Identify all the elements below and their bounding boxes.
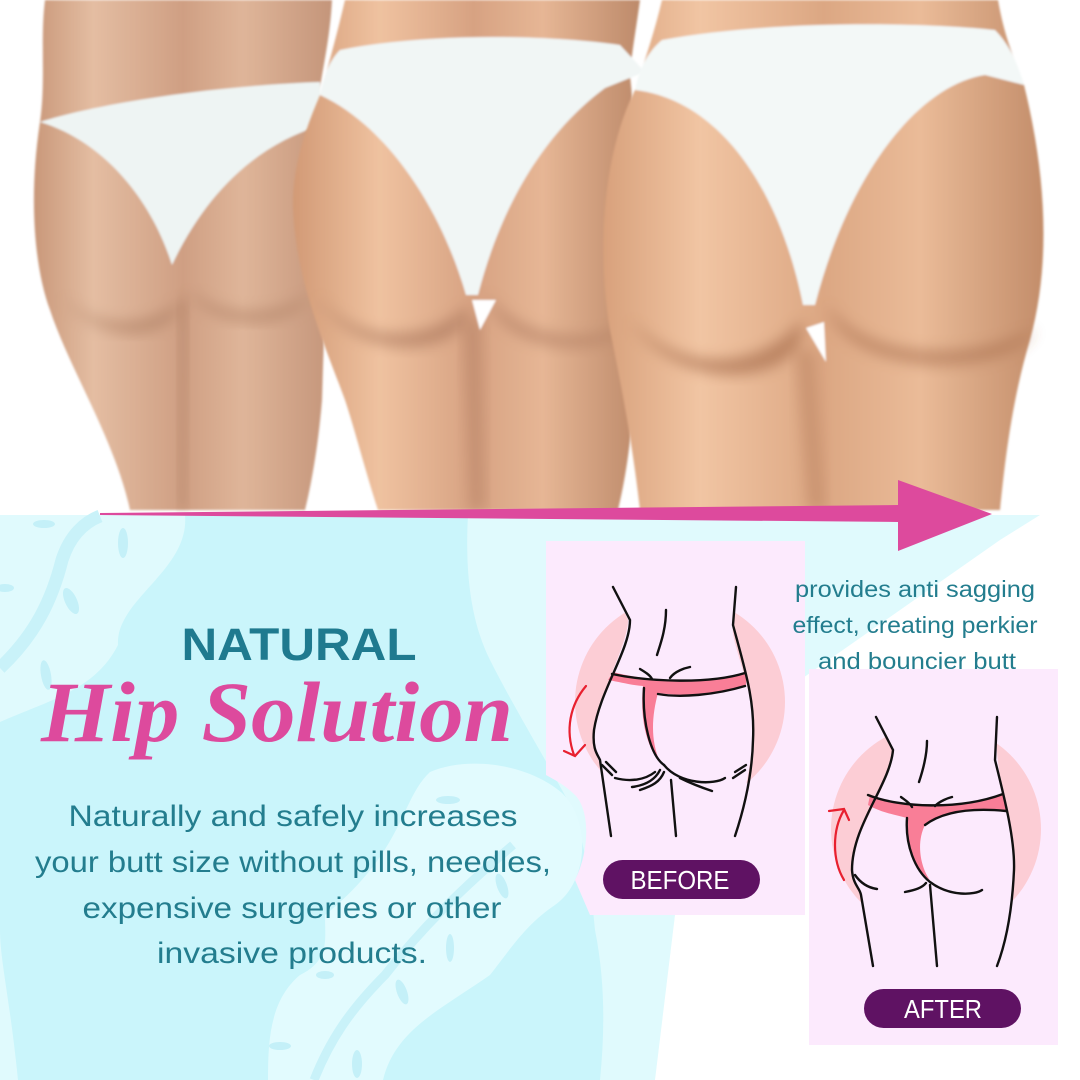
highlight circle	[831, 724, 1041, 934]
text block: description: your butt size without pills, needles,	[35, 846, 551, 879]
garment: band	[868, 794, 1008, 880]
text block: anti sagging caption: effect, creating perkier	[792, 612, 1038, 638]
heading: natural: NATURAL	[182, 619, 416, 670]
label: after: AFTER	[904, 994, 982, 1024]
photo stage 1: before	[34, 0, 332, 510]
highlight circle	[575, 597, 785, 807]
text block: description	[35, 800, 551, 970]
panel: after	[809, 669, 1058, 1045]
background panel: pale blue wave shapes	[0, 515, 1040, 1080]
label: before	[603, 860, 760, 899]
photo stage 2: middle	[293, 0, 645, 510]
photo stage 3: after	[603, 0, 1043, 510]
label: after	[864, 989, 1021, 1028]
figure fill	[593, 587, 753, 836]
text block: anti sagging caption	[792, 576, 1038, 674]
text block: anti sagging caption: and bouncier butt	[818, 648, 1017, 674]
panel: before	[546, 541, 805, 915]
figure fill	[852, 715, 1014, 966]
heading: hip solution: Hip Solution	[40, 664, 513, 760]
garment: band	[608, 672, 746, 762]
arrow: progress	[100, 480, 992, 551]
arrow: lifting up	[829, 809, 849, 880]
text block: description: Naturally and safely increases	[68, 800, 518, 833]
figure: after illustration	[852, 717, 1014, 966]
text block: anti sagging caption: provides anti sagging	[795, 576, 1035, 602]
label: before: BEFORE	[630, 865, 730, 895]
text block: description: expensive surgeries or other	[82, 892, 502, 925]
figure: before illustration	[594, 587, 753, 836]
text block: description: invasive products.	[157, 937, 427, 970]
decorative leaves	[0, 520, 511, 1078]
arrow: sagging down	[564, 686, 586, 756]
photo: three-stage body comparison	[34, 0, 1043, 510]
